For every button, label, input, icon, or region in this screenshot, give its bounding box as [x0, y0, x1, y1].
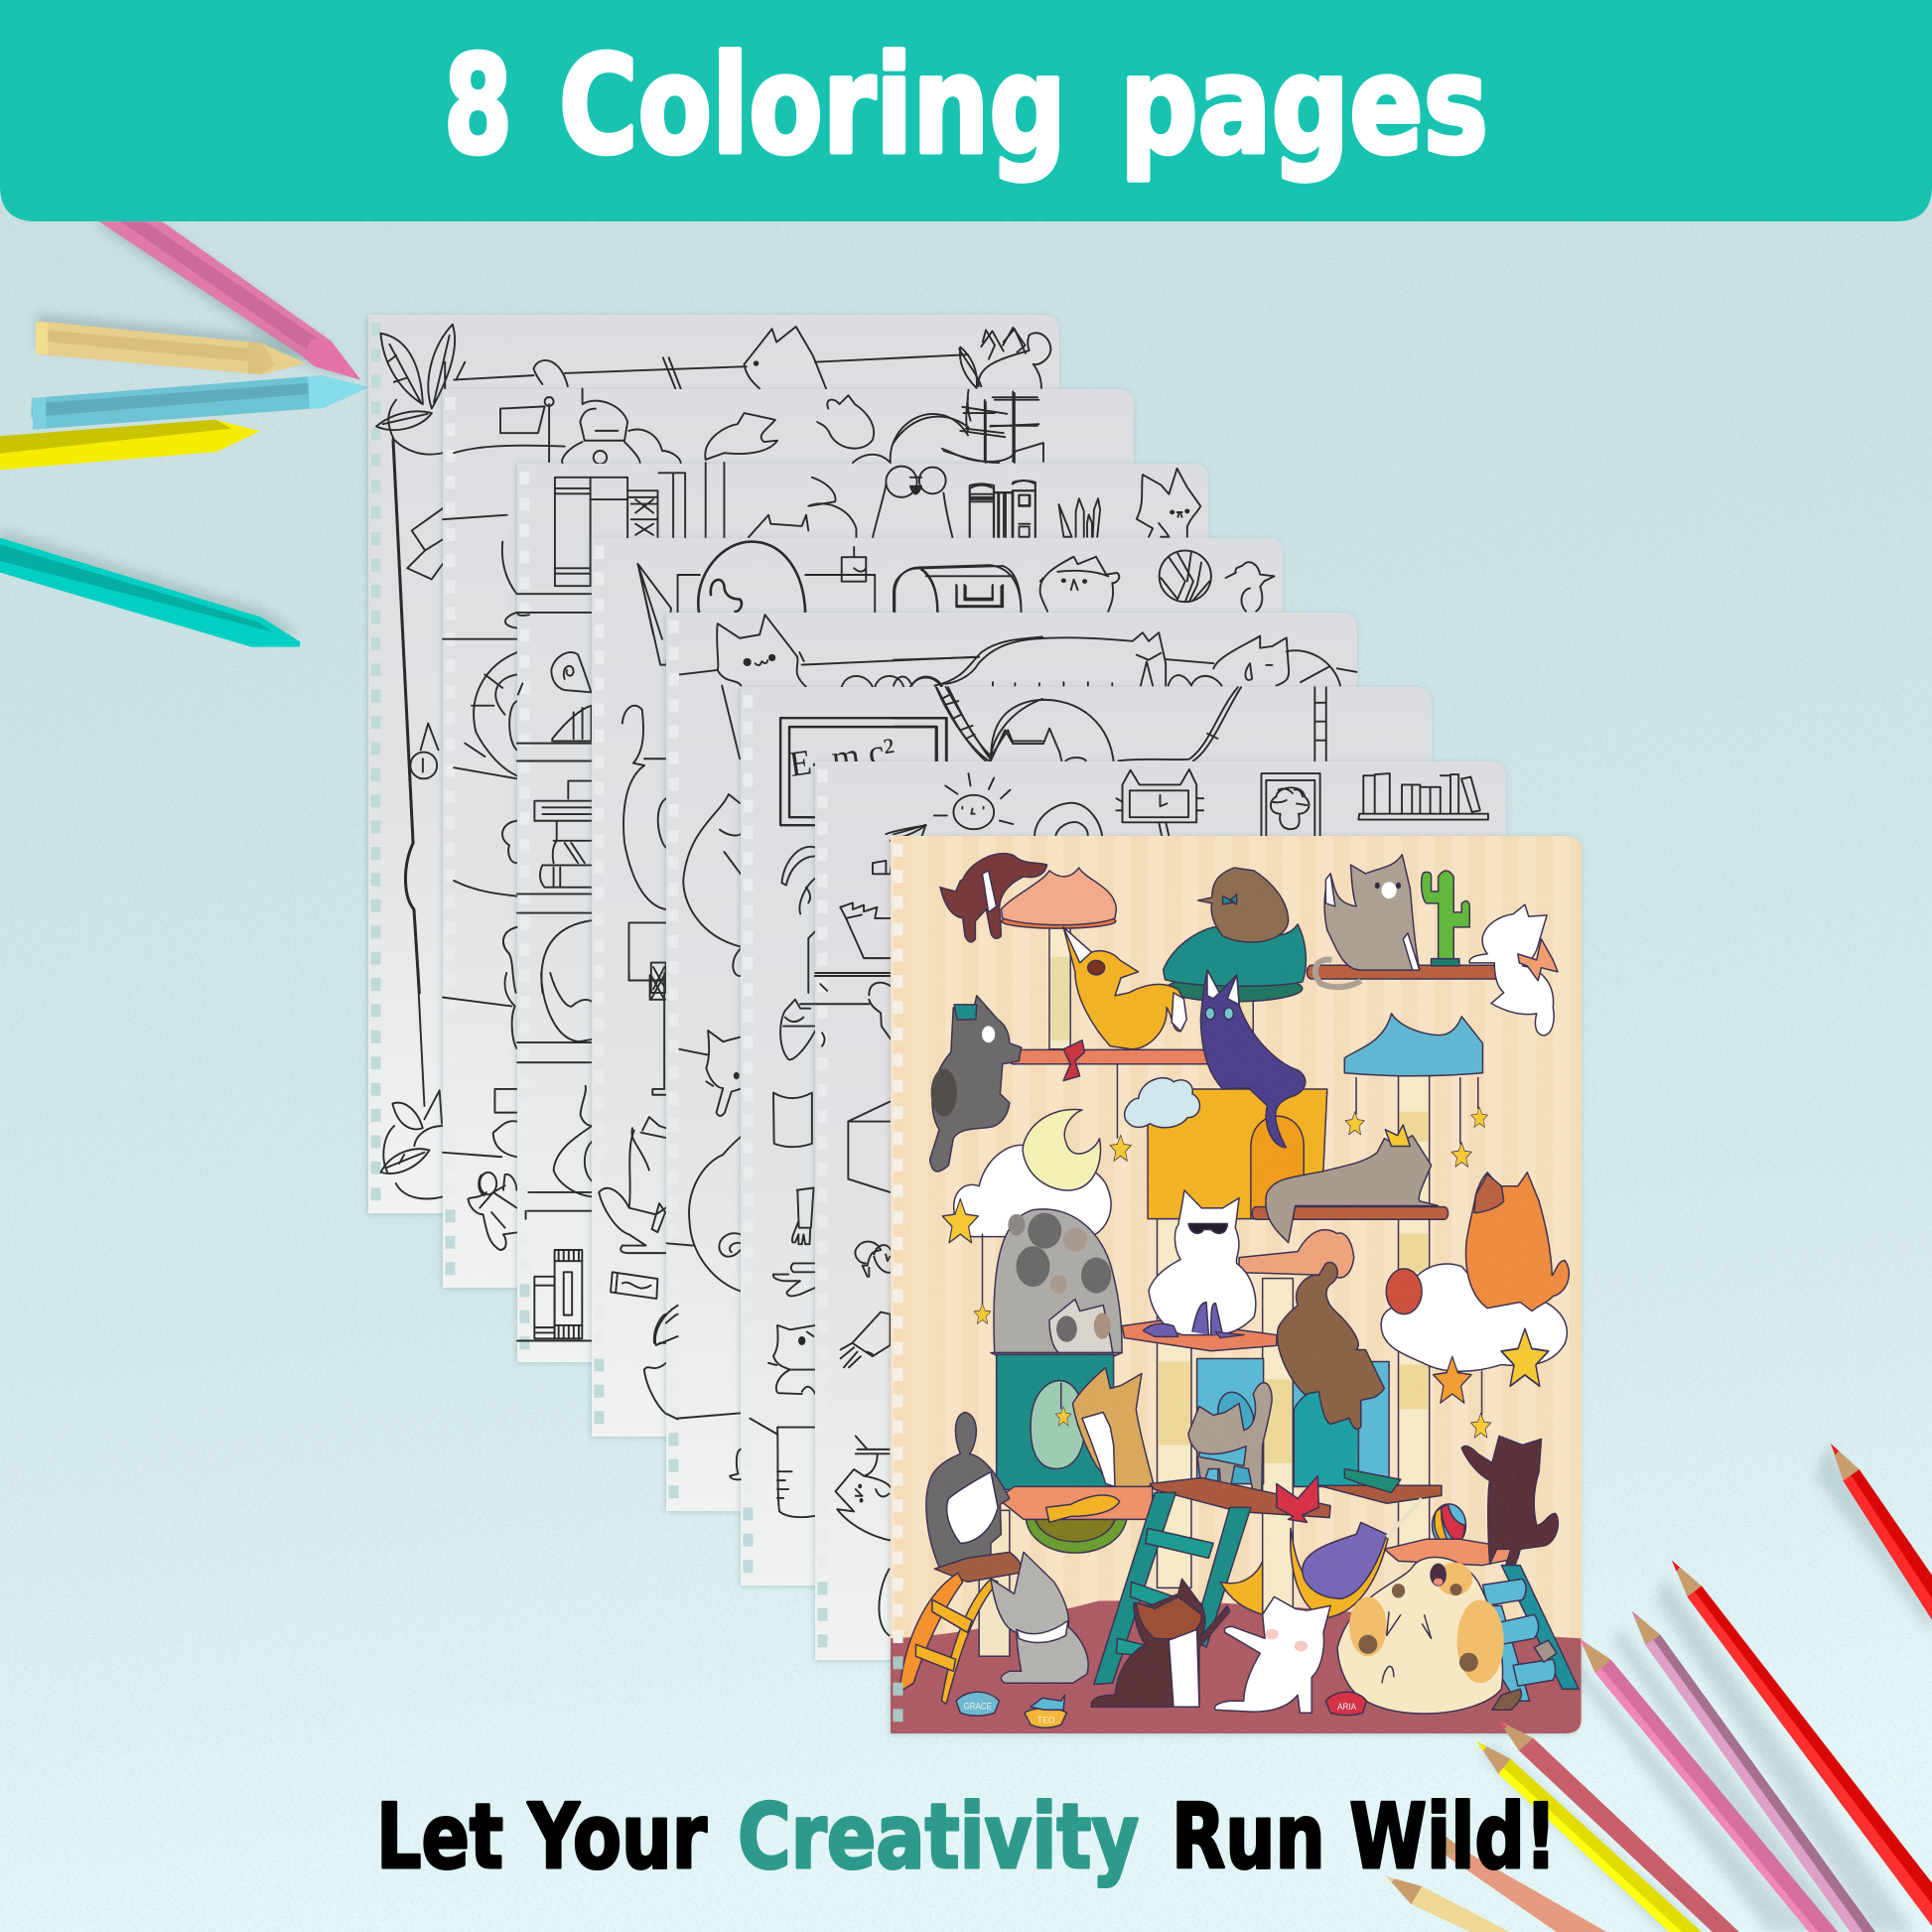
orange cat on cloud	[1381, 1173, 1569, 1438]
cat: brown climbing	[1278, 1262, 1384, 1429]
colored pencils	[1386, 1443, 1932, 1932]
coloring sheets stack	[368, 315, 1582, 1742]
chalk equation: E- m.c²	[787, 730, 897, 784]
pencil: tan	[1386, 1876, 1510, 1932]
blue and teal ladder	[1482, 1566, 1579, 1701]
tagline: Creativity	[738, 1785, 1139, 1889]
beach ball	[1433, 1504, 1465, 1547]
cat: gray with teal hat	[930, 996, 1022, 1172]
tagline	[376, 1785, 1557, 1889]
crayon: blue	[32, 375, 369, 430]
crayon: tan	[36, 314, 306, 374]
sheet 1: plant and cats line art	[368, 315, 1059, 1213]
cat tree posts	[979, 921, 1430, 1656]
sheet 8: full color cat tree illustration	[891, 836, 1582, 1742]
gray dome with cat	[991, 1209, 1122, 1357]
tagline: Let Your	[376, 1785, 707, 1889]
salmon perch with dark cat	[1384, 1436, 1558, 1566]
cat: dark red on bed	[940, 854, 1047, 942]
peach perch	[1239, 1230, 1354, 1278]
title: 8	[444, 28, 512, 185]
sheet 2: pirate line art	[443, 389, 1134, 1288]
pencil: red far right	[1831, 1444, 1932, 1620]
cat: white with bow	[1469, 904, 1558, 1035]
title: pages	[1120, 28, 1488, 185]
orange ladder	[899, 1573, 998, 1704]
sheet 6: science classroom line art	[730, 687, 1432, 1586]
pencil: yellow	[1477, 1741, 1702, 1932]
crayon: teal	[0, 528, 301, 647]
cat: gray sitting	[991, 1552, 1088, 1683]
bowl name tags	[964, 1701, 1356, 1725]
orange platform	[1122, 1320, 1277, 1351]
pencil: mauve	[1632, 1610, 1875, 1932]
tagline: Run Wild!	[1172, 1785, 1557, 1889]
teal bed and brown cat	[1164, 868, 1306, 1002]
teal cylinder house	[997, 1354, 1114, 1489]
header banner	[0, 0, 1932, 221]
title	[444, 28, 1488, 185]
sheet 3: bookshelf line art	[503, 463, 1208, 1362]
bowls	[956, 1692, 1366, 1727]
teal and blue panels	[1197, 1359, 1389, 1486]
floor rug	[891, 1600, 1582, 1742]
pencil shadows	[1481, 1443, 1932, 1932]
crayon: yellow	[0, 420, 260, 470]
small tabby with blue scarf	[1188, 1383, 1272, 1492]
cat: orange fox pose	[1063, 927, 1186, 1049]
blue bed with stars	[1110, 1014, 1488, 1167]
crayons	[0, 221, 369, 647]
sheet 5: sleeping cats line art	[655, 613, 1357, 1511]
pencil: rose	[1499, 1721, 1739, 1932]
left cloud, moon and star	[942, 1109, 1111, 1323]
cloud: blue	[1125, 1078, 1199, 1128]
bowl name tags: GRACE	[964, 1701, 992, 1712]
bowl name tags: ARIA	[1337, 1701, 1356, 1712]
cat: gray with cactus shelf	[1308, 855, 1504, 987]
sheet 7: sun, clock and bookshelf line art	[815, 761, 1506, 1660]
green ladder	[1094, 1492, 1251, 1684]
sheet 4: treasure chest and yarn line art	[592, 538, 1283, 1437]
crayon: pink	[92, 221, 360, 380]
pencil: pink	[1580, 1639, 1838, 1932]
cat: calico sitting	[1073, 1368, 1154, 1488]
cat: white arguing	[1215, 1596, 1330, 1713]
small brown round platform	[934, 1552, 1021, 1582]
salmon shelf with fish and green bowl	[998, 1486, 1153, 1553]
yellow cat house	[1148, 1089, 1327, 1219]
cat: white fluffy with sunglasses	[1143, 1190, 1256, 1338]
cat: black and white upside down	[926, 1412, 1010, 1573]
cat: fat calico	[1337, 1558, 1521, 1714]
cat: brown and white	[1091, 1579, 1230, 1707]
top salmon bed	[1001, 868, 1116, 928]
pencil: salmon	[1431, 1825, 1606, 1932]
shelf and cat: long beige	[1252, 1125, 1449, 1243]
middle salmon shelf with ribbon	[1010, 1040, 1212, 1139]
bowl name tags: TEO	[1037, 1715, 1055, 1725]
yellow hammock and purple cat	[1220, 1498, 1422, 1617]
cat: purple	[1200, 970, 1306, 1148]
pencil: red long	[1672, 1561, 1932, 1926]
title: Coloring	[559, 28, 1066, 185]
brown shelf with red bow	[1150, 1468, 1442, 1522]
